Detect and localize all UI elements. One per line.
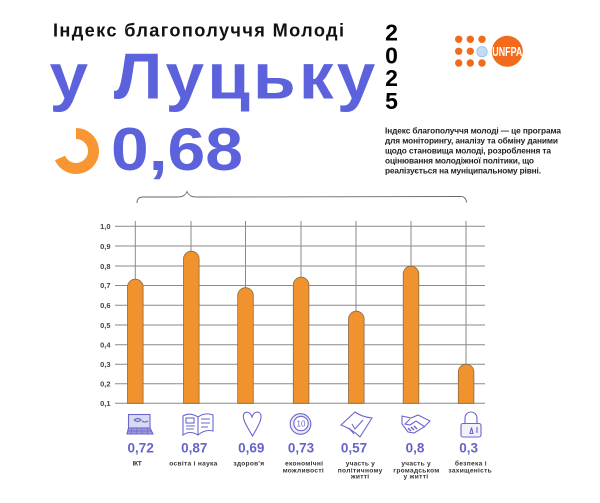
icon: heart bbox=[243, 412, 261, 436]
bar chart bbox=[100, 221, 485, 408]
description text bbox=[385, 126, 561, 176]
icon: coin: 10 bbox=[297, 420, 306, 428]
axis labels: 0,9 bbox=[100, 242, 110, 251]
axis labels bbox=[100, 222, 111, 408]
description text: Індекс благополуччя молоді — це програма bbox=[385, 126, 561, 136]
category labels: можливості bbox=[283, 466, 324, 474]
description text: щодо становища молоді, розроблення та bbox=[385, 146, 551, 156]
axis labels: 0,5 bbox=[100, 321, 110, 330]
icon: ballot bbox=[341, 412, 372, 437]
year: 2 bbox=[385, 65, 398, 91]
category labels bbox=[133, 460, 492, 481]
axis labels: 1,0 bbox=[100, 222, 110, 231]
values: 0,72 bbox=[128, 440, 154, 455]
axis labels: 0,8 bbox=[100, 262, 110, 271]
category labels: участь у bbox=[346, 461, 375, 468]
category labels: економічні bbox=[285, 460, 323, 468]
values: 0,87 bbox=[181, 440, 207, 455]
category labels: здоров'я bbox=[233, 461, 264, 468]
year: 5 bbox=[385, 88, 398, 114]
category labels: освіта і наука bbox=[169, 460, 218, 468]
icon: coin bbox=[290, 414, 311, 434]
values bbox=[128, 440, 479, 455]
category labels: ІКТ bbox=[133, 461, 142, 468]
values: 0,69 bbox=[238, 440, 264, 455]
axis labels: 0,6 bbox=[100, 301, 110, 310]
icon: book bbox=[183, 414, 213, 435]
category labels: громадськом bbox=[393, 467, 439, 474]
description text: для моніторингу, аналізу та обміну даними bbox=[385, 136, 558, 146]
axis labels: 0,1 bbox=[100, 399, 110, 408]
category labels: захищеність bbox=[448, 466, 492, 474]
category labels: житті bbox=[350, 473, 369, 481]
category labels: безпека і bbox=[455, 460, 487, 468]
logo: UNFPA: UNFPA bbox=[492, 45, 522, 59]
icon: laptop bbox=[127, 414, 153, 434]
logo: UNFPA bbox=[455, 36, 523, 67]
axis labels: 0,4 bbox=[100, 340, 111, 350]
category labels: політичному bbox=[338, 466, 383, 474]
title: Індекс благополуччя Молоді bbox=[53, 20, 344, 40]
icon: handshake bbox=[402, 415, 430, 433]
category labels: у житті bbox=[403, 473, 428, 481]
brace bbox=[137, 192, 467, 203]
index value: 0,68 bbox=[111, 116, 243, 183]
axis labels: 0,2 bbox=[100, 380, 110, 388]
icon: index ring bbox=[60, 133, 94, 168]
description text: реалізується на муніципальному рівні. bbox=[385, 166, 541, 176]
category labels: участь у bbox=[401, 461, 431, 468]
axis labels: 0,3 bbox=[100, 360, 110, 369]
values: 0,57 bbox=[341, 440, 367, 455]
values: 0,3 bbox=[459, 440, 479, 455]
year bbox=[385, 20, 398, 114]
year: 0 bbox=[385, 42, 398, 68]
description text: оцінювання молодіжної політики, що bbox=[385, 156, 534, 166]
bars bbox=[128, 251, 474, 403]
values: 0,8 bbox=[406, 440, 425, 455]
icon: padlock bbox=[461, 412, 481, 437]
axis labels: 0,7 bbox=[100, 281, 110, 290]
values: 0,73 bbox=[288, 440, 315, 455]
heading: city: у Луцьку bbox=[50, 40, 378, 112]
year: 2 bbox=[385, 20, 398, 46]
